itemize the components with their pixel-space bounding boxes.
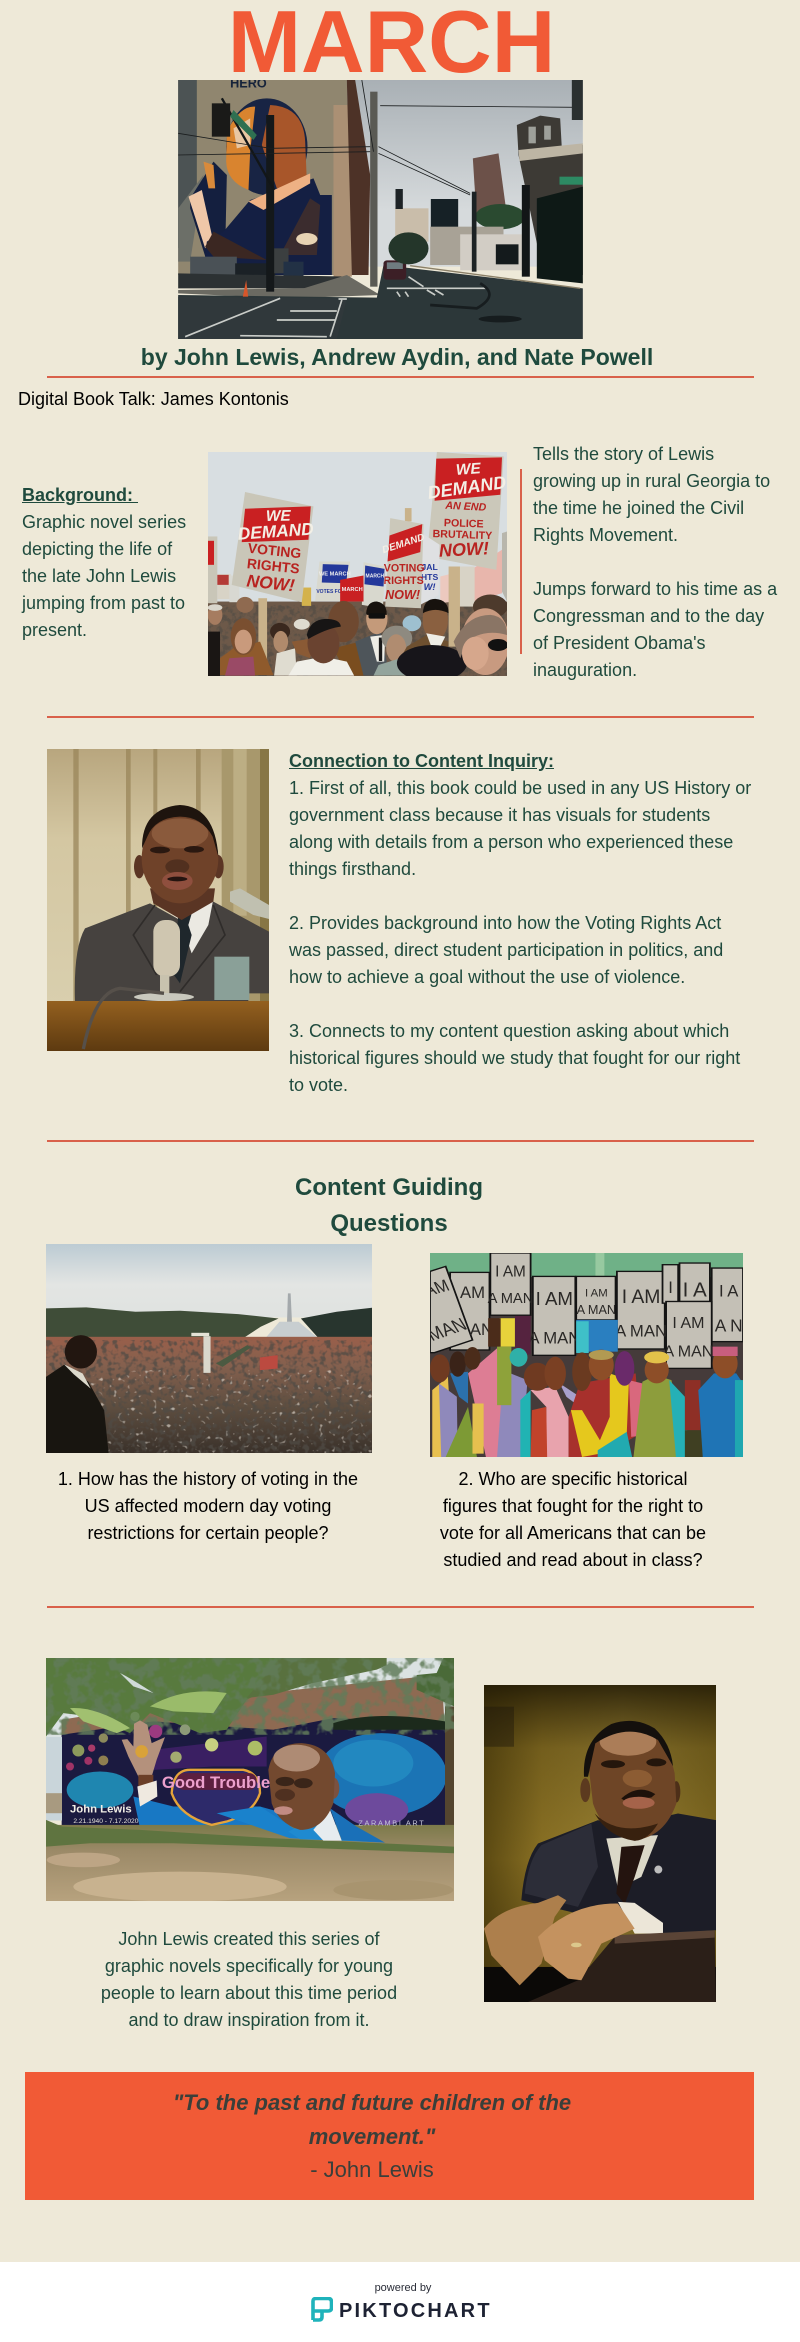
subtitle: authors: by John Lewis, Andrew Aydin, and Nate Powell [141,344,653,370]
question 2: studied and read about in class? [443,1550,703,1570]
foliage [46,1658,280,1736]
caption: about the series: John Lewis created this series of [118,1929,380,1949]
skyline [395,208,428,242]
photo: voting rights march signs: DEMAND [237,518,315,544]
photo: voting rights march signs: W! [424,582,436,592]
question 2 [440,1469,706,1570]
question 2: 2. Who are specific historical [458,1469,688,1489]
byline: Digital Book Talk: James Kontonis [18,389,289,409]
text block: background: Background: [22,485,133,505]
photo: Martin Luther King Jr. at lectern [484,1685,716,2002]
text block: story summary: Tells the story of Lewis [533,444,714,464]
photo: I Am A Man mural: A N [715,1316,743,1336]
question 1: restrictions for certain people? [87,1523,329,1543]
photo: I Am A Man mural: I AM [622,1286,660,1308]
photo: voting rights march signs: MARCH [342,587,363,593]
question 1 [58,1469,358,1543]
photo: I Am A Man mural: A MAN [615,1322,667,1341]
photo: voting rights march signs: DEMAND [426,472,507,503]
left sign [232,492,313,602]
photo: I Am A Man mural: I [668,1278,673,1297]
powered by: powered by [375,2282,431,2294]
heading: content guiding questions [295,1174,483,1237]
text block: connection to content inquiry: 3. Connects to my content question asking about which [289,1021,729,1041]
photo: voting rights march signs: BRUTALITY [432,528,492,542]
text block: story summary: Jumps forward to his time as a [533,579,777,599]
photo: voting rights march signs: JAL [421,562,438,572]
small blue signs [315,561,350,601]
text block: connection to content inquiry: government class because it has visuals for students [289,805,710,825]
photo: voting rights march signs: WE [266,508,292,525]
pink flag stripes [440,573,454,603]
quote text [173,2090,571,2182]
photo: I Am A Man mural: AM [460,1283,485,1302]
figures [468,1348,510,1457]
photo: voting rights march signs: HTS [421,572,438,582]
photo: voting rights march signs: POLICE [444,517,484,530]
question 1: US affected modern day voting [85,1496,331,1516]
photo: Good Trouble mural: 2.21.1940 - 7.17.2020 [73,1818,139,1825]
photo: I Am A Man mural: I AM [495,1263,526,1280]
text block: connection to content inquiry [289,751,751,1095]
icon: piktochart logo [311,2297,333,2322]
photo: voting rights march signs: MARCH [366,574,385,580]
photo: I Am A Man mural: A MAN [577,1303,616,1317]
text block: background: present. [22,620,87,640]
text block: background: Graphic novel series [22,512,186,532]
hand [122,1720,165,1776]
photo: Good Trouble mural [46,1658,454,1901]
photo: voting rights march signs: VOTES FOR [316,589,346,595]
street parked cars [190,257,237,275]
photo: Good Trouble mural: ZARAMBI ART [358,1819,425,1828]
text block: story summary: Congressman and to the day [533,606,764,626]
heading: content guiding questions: Content Guiding [295,1174,483,1201]
photo: voting rights march signs: DEMAND [381,532,426,556]
photo: I Am A Man mural: I AM [672,1314,704,1332]
wall colours [499,1318,515,1347]
piktochart wordmark: PIKTOCHART [339,2300,492,2322]
caption: about the series [101,1929,397,2030]
text block: connection to content inquiry: 2. Provides background into how the Voting Rights Act [289,913,721,933]
Good Trouble logo [172,1770,260,1825]
photo: voting rights march signs: NOW! [246,570,296,595]
photo: voting rights march signs: WE [455,460,482,479]
text block: story summary: growing up in rural Georgia to [533,471,770,491]
text block: story summary: the time he joined the Civil [533,498,744,518]
photo: voting rights march signs: RIGHTS [246,555,300,577]
photo: I Am A Man mural [430,1253,743,1457]
placards [430,1253,743,1368]
crowd [208,632,220,676]
text block: connection to content inquiry: along with details from a person who experienced these [289,832,733,852]
car [384,260,406,280]
crosswalk [185,277,487,337]
question 2: vote for all Americans that can be [440,1523,706,1543]
text block: story summary: inauguration. [533,660,637,680]
footer [0,2262,800,2342]
orbs [72,1744,84,1756]
photo: Good Trouble mural: Good Trouble [162,1773,270,1792]
photo: voting rights march signs: WE MARCH [319,572,351,578]
photo: voting rights march signs: VOTING [384,563,425,575]
heading: content guiding questions: Questions [330,1210,448,1237]
text block: connection to content inquiry: 1. First of all, this book could be used in any US History or [289,778,751,798]
mural captions: John Lewis [70,1804,132,1816]
vertical divider [520,469,522,654]
text block: connection to content inquiry: historical figures should we study that fought for our right [289,1048,740,1068]
poles [370,92,378,287]
photo: voting rights march signs: VOTING [247,540,302,561]
text block: connection to content inquiry: Connection to Content Inquiry: [289,751,554,771]
photo: voting rights march signs: AN END [444,500,487,514]
photo: I Am A Man mural: A MAN [528,1328,580,1347]
text block: background [22,485,186,640]
photo: voting rights march signs: NOW! [385,588,420,602]
quote text: - John Lewis [310,2157,434,2182]
text block: connection to content inquiry: was passed, direct student participation in politics, and [289,940,723,960]
photo: I Am A Man mural: I A [719,1281,739,1300]
tower [517,116,583,275]
photo: voting rights march signs [208,452,507,676]
photo: I Am A Man mural: AN [470,1320,493,1339]
text block: story summary [533,444,778,680]
photo: John Lewis at microphone [47,749,269,1051]
photo: voting rights march signs: NOW! [438,538,489,561]
quote text: "To the past and future children of the [173,2090,571,2115]
text block: story summary: of President Obama's [533,633,706,653]
photo: street mural of John Lewis [178,80,583,339]
Lewis portrait [217,1807,385,1843]
question 1: 1. How has the history of voting in the [58,1469,358,1489]
caption: about the series: and to draw inspiration from it. [128,2010,370,2030]
photo: I Am A Man mural: I AM [585,1287,608,1299]
text block: background: the late John Lewis [22,566,176,586]
text block: connection to content inquiry: to vote. [289,1075,348,1095]
question 2: figures that fought for the right to [443,1496,703,1516]
ground [46,1825,454,1901]
photo: I Am A Man mural: I A [683,1278,707,1301]
text block: story summary: Rights Movement. [533,525,678,545]
middle sign [385,518,424,608]
quote text: movement." [309,2124,435,2148]
photo: I Am A Man mural: A MAN [488,1291,533,1307]
caption: about the series: graphic novels specifically for young [105,1956,393,1976]
quote banner [25,2072,754,2200]
heads [430,1354,450,1382]
photo: voting rights march signs: RIGHTS [383,575,424,587]
photo: crowd at the National Mall [46,1244,372,1453]
old man with beret [288,657,354,676]
text block: background: depicting the life of [22,539,172,559]
JAL RIGHTS sign [420,533,440,605]
photo: I Am A Man mural: A MAN [664,1343,713,1361]
caption: about the series: people to learn about this time period [101,1983,397,2003]
text block: connection to content inquiry: things firsthand. [289,859,416,879]
photo: I Am A Man mural: I AM [536,1288,573,1309]
far-left sign [208,536,217,603]
text block: background: jumping from past to [22,593,185,613]
text block: connection to content inquiry: how to achieve a goal without the use of violence. [289,967,685,987]
right sign [427,452,504,570]
